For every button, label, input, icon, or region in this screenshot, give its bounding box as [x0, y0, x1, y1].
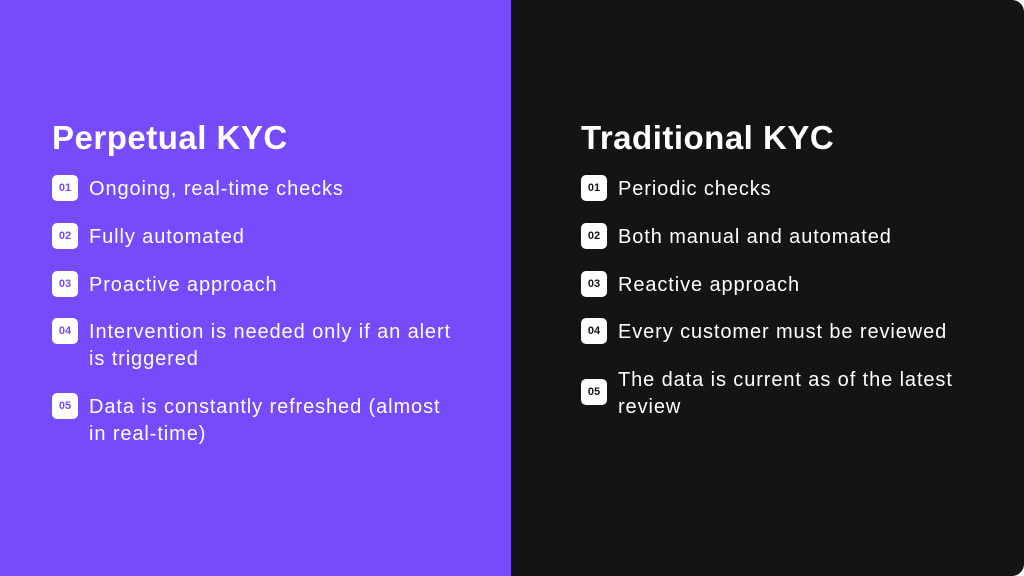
item 01: Periodic checks — [618, 178, 772, 200]
item 05: review — [618, 396, 681, 418]
item 05 — [581, 369, 953, 418]
item 05: 05 — [59, 400, 71, 412]
item 05 — [52, 393, 440, 445]
item 05: 05 — [588, 386, 600, 398]
item 05: The data is current as of the latest — [618, 369, 953, 391]
item 05: in real-time) — [89, 423, 206, 445]
item 05: Data is constantly refreshed (almost — [89, 396, 440, 418]
item 03: Reactive approach — [618, 274, 800, 296]
item 04: Every customer must be reviewed — [618, 321, 947, 343]
item 04: 04 — [59, 325, 71, 337]
item 01: Ongoing, real-time checks — [89, 178, 344, 200]
item 02: 02 — [59, 230, 71, 242]
heading: Perpetual KYC: Perpetual KYC — [52, 119, 288, 156]
heading: Traditional KYC: Traditional KYC — [581, 119, 834, 156]
item 03: Proactive approach — [89, 274, 278, 296]
item 02 — [52, 223, 245, 249]
item 02: Both manual and automated — [618, 226, 892, 248]
item 04: Intervention is needed only if an alert — [89, 321, 451, 343]
item 04 — [52, 318, 451, 370]
item 01: 01 — [588, 182, 600, 194]
item 04: is triggered — [89, 348, 199, 370]
item 03: 03 — [588, 278, 600, 290]
item 03: 03 — [59, 278, 71, 290]
item 04: 04 — [588, 325, 600, 337]
item 02: 02 — [588, 230, 600, 242]
item 02: Fully automated — [89, 226, 245, 248]
panel: perpetual KYC — [0, 0, 511, 576]
item 01 — [581, 175, 772, 201]
item 01: 01 — [59, 182, 71, 194]
panel: traditional KYC — [511, 0, 1024, 576]
